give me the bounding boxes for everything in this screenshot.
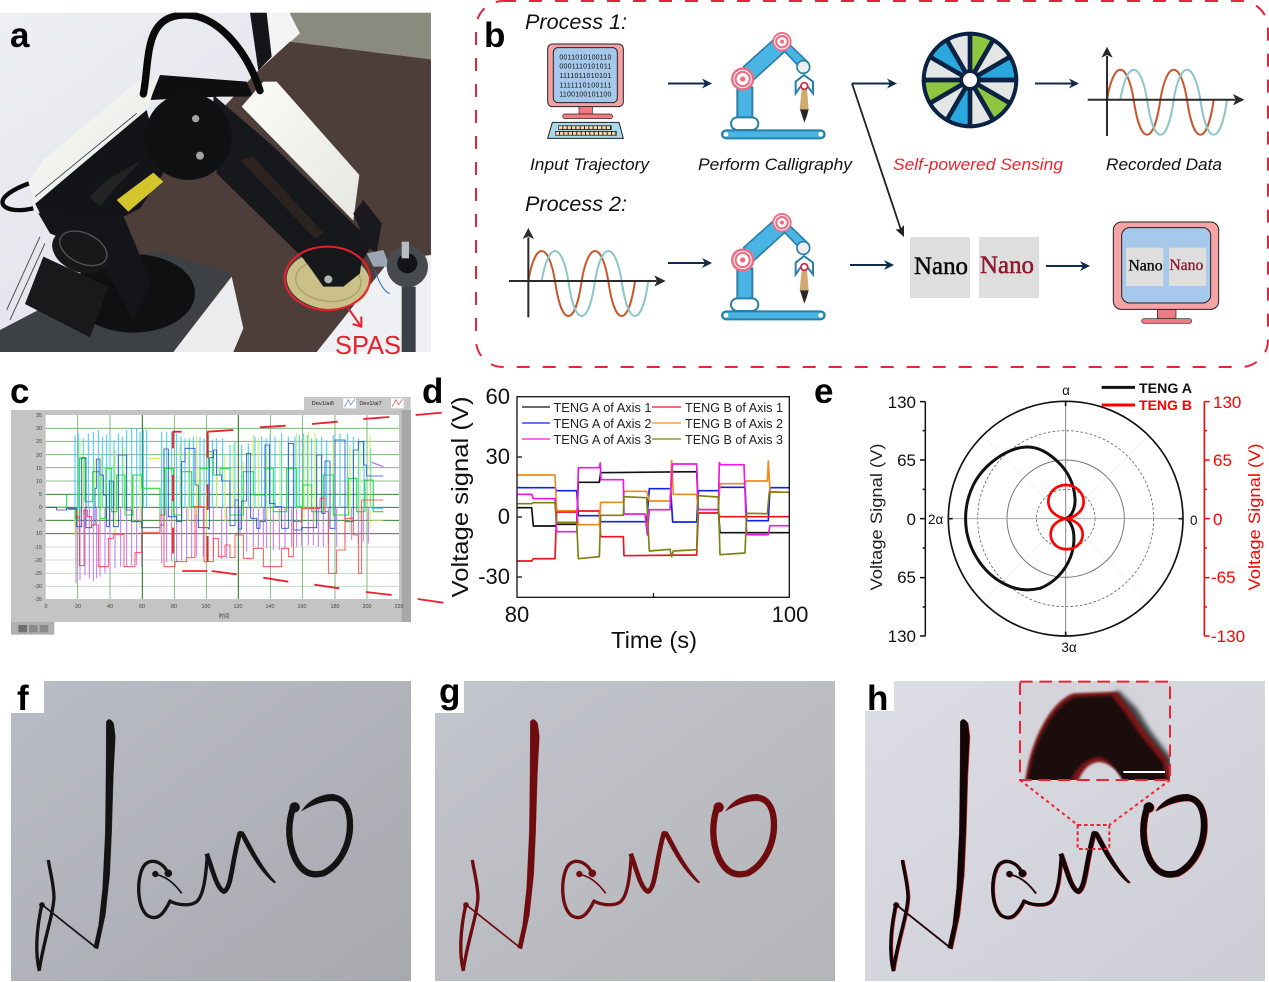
polar grid — [948, 401, 1183, 636]
panel h: overlay handwriting with inset — [865, 679, 1265, 981]
icon: sensing wheel — [922, 32, 1018, 128]
legend d: TENG A of Axis 1 — [554, 401, 652, 415]
axis tick labels of panel c: -25 — [34, 571, 42, 577]
left tick labels e — [888, 393, 916, 646]
x tick labels of panel c: 140 — [266, 604, 274, 610]
handwriting f — [37, 719, 350, 971]
chart icon: input waves — [509, 228, 666, 317]
tile: red Nano — [979, 237, 1039, 298]
icon: computer with binary: 1100100101100 — [559, 92, 611, 99]
tick labels d: 100 — [772, 602, 808, 627]
axis ticks d — [517, 457, 654, 597]
icon: robot arm process 1 — [722, 32, 825, 138]
icon: monitor showing Nano: Nano — [1128, 258, 1163, 275]
axis tick labels of panel c: -35 — [34, 597, 42, 603]
handwriting g — [461, 719, 774, 971]
tick labels d: 80 — [505, 602, 529, 627]
right axis title e: Voltage Signal (V) — [1245, 444, 1264, 590]
label c: c — [10, 372, 29, 411]
handwriting h — [891, 719, 1205, 971]
axis tick labels of panel c: 30 — [36, 426, 42, 432]
x tick labels of panel c — [44, 604, 404, 620]
signal traces — [46, 428, 383, 583]
angle labels e: 0 — [1190, 513, 1198, 528]
heading: process 1: Process 1: — [525, 11, 627, 34]
left axis title e: Voltage Signal (V) — [867, 444, 886, 590]
axis tick labels of panel c: -20 — [34, 558, 42, 564]
panel a: robot arm photo — [0, 13, 431, 360]
legend strip: Dev1/ai6 — [312, 401, 334, 407]
legend strip — [312, 398, 404, 408]
x tick labels of panel c: 20 — [75, 604, 81, 610]
x tick labels of panel c: 60 — [139, 604, 145, 610]
right tick labels e: -130 — [1211, 627, 1245, 646]
x tick labels of panel c: 80 — [171, 604, 177, 610]
angle labels e: α — [1062, 383, 1070, 398]
tile: black Nano — [910, 237, 970, 298]
axis tick labels of panel c: 5 — [39, 492, 42, 498]
right axis — [1204, 402, 1210, 636]
legend text e: TENG A — [1139, 380, 1192, 396]
right tick labels e — [1211, 393, 1245, 646]
left tick labels e: 130 — [888, 393, 916, 412]
axis tick labels of panel c: 0 — [39, 505, 42, 511]
axis tick labels of panel c: 10 — [36, 479, 42, 485]
legend d: TENG B of Axis 1 — [685, 401, 783, 415]
inset zoom — [1020, 682, 1173, 849]
label e: e — [814, 372, 833, 411]
signal traces d — [517, 460, 789, 561]
panel e: polar plot — [867, 380, 1264, 655]
legend d: TENG B of Axis 2 — [685, 417, 783, 431]
label h: h — [867, 679, 888, 718]
legend d: TENG A of Axis 2 — [554, 417, 652, 431]
caption: input trajectory: Input Trajectory — [530, 155, 651, 174]
panel e: polar plot: TENG B — [1139, 397, 1192, 413]
arrows between steps — [668, 78, 1090, 271]
axis tick labels of panel c: -30 — [34, 584, 42, 590]
icon: monitor showing Nano — [1113, 222, 1219, 323]
caption: perform calligraphy: Perform Calligraphy — [698, 155, 854, 174]
caption: self-powered sensing: Self-powered Sensing — [893, 155, 1064, 174]
inset frame and zoom guides — [1020, 682, 1170, 849]
tick labels d: 30 — [486, 444, 510, 469]
legend d — [522, 401, 783, 447]
left tick labels e: 65 — [897, 451, 916, 470]
panel d: voltage signal line chart — [447, 384, 808, 653]
grid — [46, 415, 399, 599]
right tick labels e: -65 — [1211, 568, 1236, 587]
dashed frame — [476, 1, 1268, 367]
panel g: red handwriting — [435, 672, 835, 981]
tile: black Nano: Nano — [914, 253, 968, 280]
x tick labels of panel c: 0 — [44, 604, 48, 610]
tick labels d: 0 — [498, 504, 510, 529]
x tick labels of panel c: 时间 — [219, 612, 229, 620]
angle labels e: 3α — [1061, 640, 1077, 655]
x tick labels of panel c: 120 — [234, 604, 242, 610]
right tick labels e: 130 — [1213, 393, 1241, 412]
heading: process 2: Process 2: — [525, 193, 627, 216]
axis tick labels of panel c: 35 — [36, 413, 42, 419]
left tick labels e: 65 — [897, 568, 916, 587]
x tick labels of panel c: 40 — [107, 604, 113, 610]
scale bar — [1123, 769, 1165, 775]
x tick labels of panel c: 180 — [330, 604, 340, 610]
x axis title d: Time (s) — [611, 627, 697, 653]
label b: b — [484, 16, 505, 55]
angle labels e — [928, 383, 1198, 655]
curve: TENG B — [1048, 485, 1084, 549]
tick labels d: 60 — [486, 384, 510, 409]
icon: computer with binary: 1111011010101 — [559, 73, 611, 80]
legend lines — [1102, 383, 1135, 392]
axis tick labels of panel c: -15 — [34, 545, 42, 551]
icon: monitor showing Nano: Nano — [1169, 257, 1203, 274]
axis tick labels of panel c: 10 — [36, 531, 42, 537]
left tick labels e: 0 — [907, 510, 916, 529]
axis tick labels of panel c: -5 — [37, 518, 42, 524]
legend d: TENG A of Axis 3 — [554, 433, 652, 447]
icon: computer with binary — [548, 44, 623, 138]
icon: computer with binary: 1111110100111 — [559, 82, 611, 89]
left axis — [920, 402, 925, 636]
tick labels d — [478, 384, 808, 627]
right tick labels e: 65 — [1213, 451, 1232, 470]
SPAS label: SPAS — [335, 332, 401, 360]
panel c: full-length signal recording screenshot — [11, 397, 443, 635]
axis tick labels of panel c: 15 — [36, 466, 42, 472]
y axis title d: Voltage signal (V) — [447, 397, 473, 597]
red alignment guides — [172, 413, 443, 603]
label g: g — [439, 672, 460, 711]
angle labels e: 2α — [928, 512, 944, 527]
x tick labels of panel c: 160 — [298, 604, 306, 610]
left tick labels e: 130 — [888, 627, 916, 646]
axes box d — [517, 397, 789, 597]
x tick labels of panel c: 220 — [394, 604, 404, 610]
axis tick labels of panel c: 25 — [36, 439, 42, 445]
right tick labels e: 0 — [1213, 510, 1222, 529]
legend d: TENG B of Axis 3 — [685, 433, 783, 447]
tick labels d: -30 — [478, 564, 510, 589]
label d: d — [422, 372, 443, 411]
tile: red Nano: Nano — [980, 252, 1034, 279]
caption: recorded data: Recorded Data — [1106, 155, 1222, 174]
legend strip: Dev1/ai7 — [359, 401, 382, 407]
icon: computer with binary: 0011010100110 — [559, 54, 611, 61]
label f: f — [17, 679, 29, 718]
icon: computer with binary: 0001110101011 — [559, 64, 611, 71]
curve: TENG A — [966, 447, 1075, 590]
label a: a — [10, 16, 30, 55]
panel f: black handwriting — [11, 679, 411, 981]
x tick labels of panel c: 100 — [202, 604, 210, 610]
chart icon: recorded data waves — [1088, 47, 1244, 136]
x tick labels of panel c: 200 — [362, 604, 372, 610]
axis tick labels of panel c — [34, 413, 42, 603]
axis tick labels of panel c: 20 — [36, 453, 42, 459]
icon: robot arm process 2 — [722, 213, 825, 319]
panel b: process flow — [476, 1, 1268, 367]
